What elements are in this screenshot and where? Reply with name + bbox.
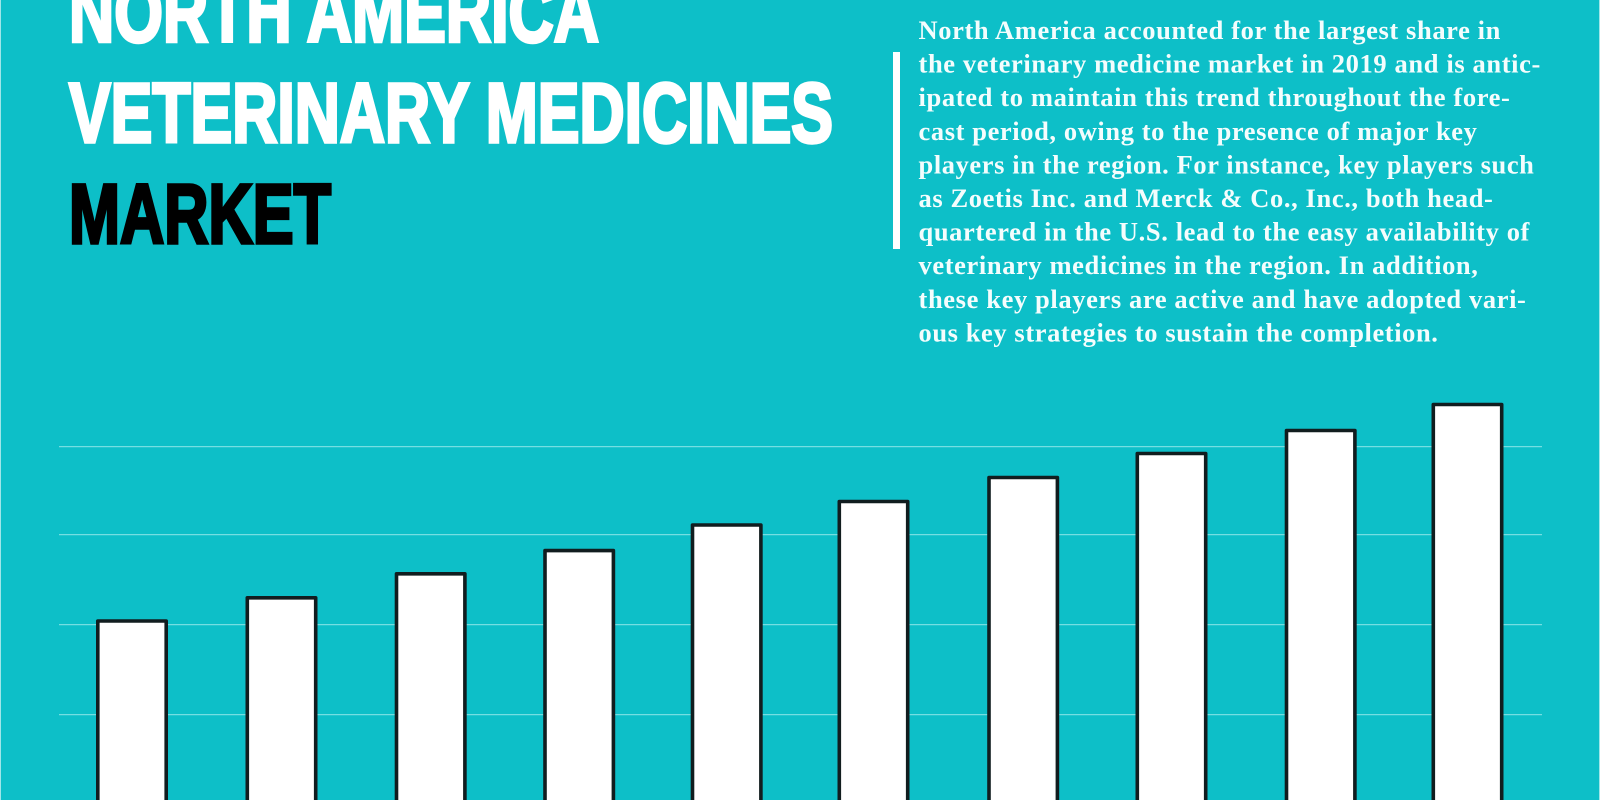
title line: Market: MARKET	[69, 167, 331, 261]
bars rising over ten periods	[98, 404, 1502, 800]
title line: Veterinary Medicines: VETERINARY MEDICINES	[69, 66, 833, 160]
text block: North America summary: ous key strategies to sustain the completion.	[918, 318, 1438, 347]
text block: North America summary	[918, 16, 1541, 347]
text block: North America summary: cast period, owing to the presence of major key	[918, 117, 1478, 146]
accent bar beside paragraph	[893, 52, 900, 249]
text block: North America summary: veterinary medicines in the region. In addition,	[918, 251, 1478, 280]
text block: North America summary: players in the region. For instance, key players such	[918, 150, 1534, 179]
text block: North America summary: the veterinary medicine market in 2019 and is antic-	[918, 50, 1541, 79]
bar chart	[59, 404, 1542, 800]
text block: North America summary: as Zoetis Inc. and Merck & Co., Inc., both head-	[918, 184, 1494, 213]
text block: North America summary: quartered in the U.S. lead to the easy availability of	[918, 218, 1530, 247]
text block: North America summary: ipated to maintain this trend throughout the fore-	[918, 83, 1510, 112]
text block: North America summary: these key players are active and have adopted vari-	[918, 285, 1526, 314]
text block: North America summary: North America accounted for the largest share in	[918, 16, 1501, 45]
title	[69, 0, 833, 261]
